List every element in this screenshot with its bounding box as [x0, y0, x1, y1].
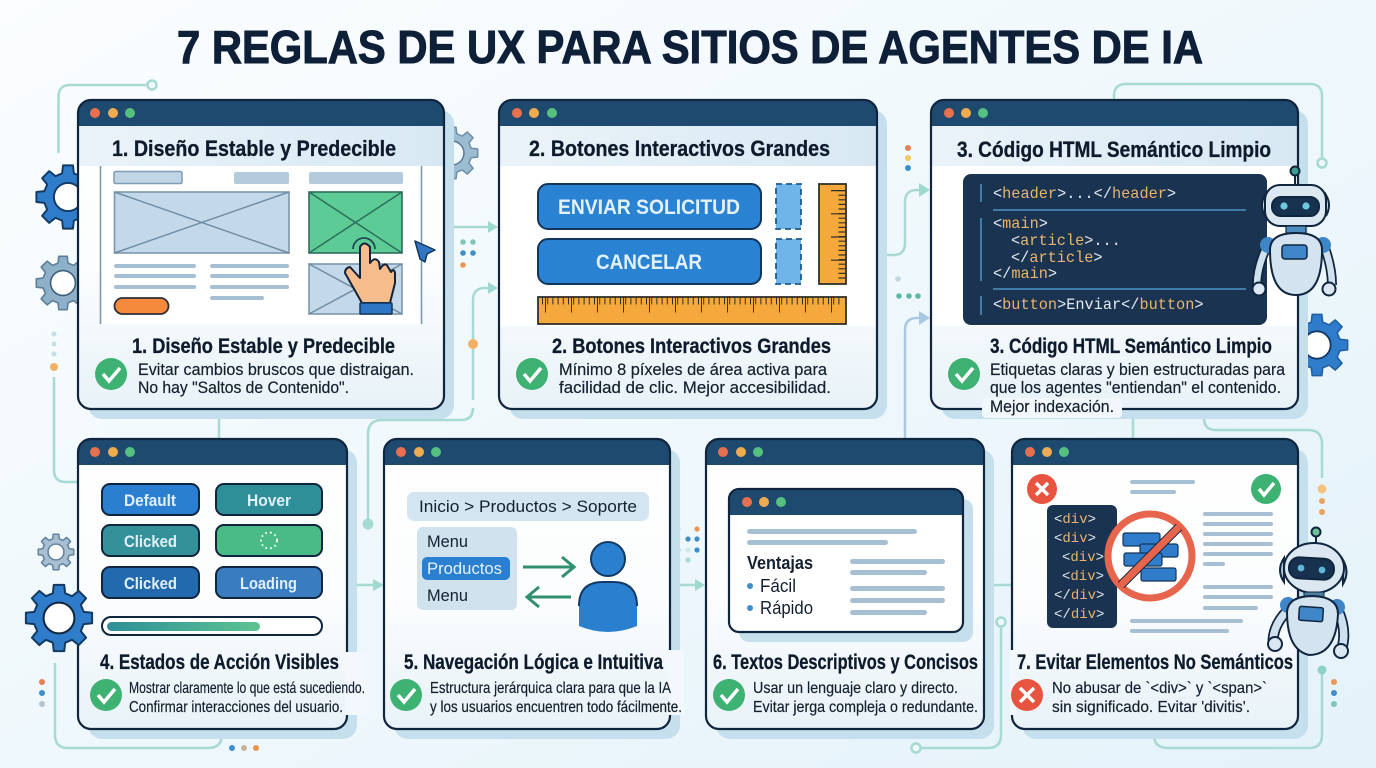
breadcrumb — [407, 492, 649, 521]
description panel 4 — [129, 680, 365, 716]
code block div: <div> — [1054, 512, 1096, 528]
code block div: </div> — [1054, 588, 1104, 604]
inner window: Rápido — [760, 598, 813, 618]
description panel 4: Confirmar interacciones del usuario. — [129, 699, 343, 716]
heading: panel 5: 5. Navegación Lógica e Intuitiva — [404, 651, 663, 674]
button: clicked teal — [102, 525, 199, 556]
vertical ruler — [819, 184, 846, 284]
icon: check — [390, 679, 422, 711]
description panel 1 — [138, 361, 414, 397]
code block div: </div> — [1054, 607, 1104, 623]
description panel 5 — [430, 680, 682, 716]
description panel 2: Mínimo 8 píxeles de área activa para — [559, 361, 828, 379]
arrowheads — [373, 183, 930, 591]
icon: prohibited bubbles — [1108, 514, 1192, 598]
button: default: Default — [124, 491, 176, 510]
description panel 3: Etiquetas claras y bien estructuradas para — [990, 361, 1286, 379]
breadcrumb: Inicio > Productos > Soporte — [419, 497, 637, 516]
code block: </main> — [993, 265, 1057, 283]
description panel 4: Mostrar claramente lo que está sucediendo. — [129, 680, 365, 697]
icon: check — [713, 679, 745, 711]
icon: red x — [1011, 679, 1043, 711]
description panel 6 — [753, 680, 978, 716]
heading: panel 2 title: 2. Botones Interactivos Grandes — [529, 136, 830, 161]
title: 7 REGLAS DE UX PARA SITIOS DE AGENTES DE IA — [177, 21, 1203, 73]
dashed target areas — [776, 184, 801, 284]
text skeleton lines — [1130, 480, 1273, 633]
heading: panel 6: 6. Textos Descriptivos y Concisos — [713, 651, 978, 674]
icon: check — [90, 679, 122, 711]
heading: panel 3 title: 3. Código HTML Semántico Limpio — [957, 137, 1271, 162]
inner window: Ventajas — [747, 553, 813, 573]
button: enviar solicitud — [538, 184, 761, 229]
icon: green check — [1251, 474, 1281, 504]
button: loading — [216, 567, 322, 598]
icon: user — [579, 542, 637, 632]
code block div: <div> — [1062, 550, 1104, 566]
button: hover: Hover — [247, 491, 291, 510]
decorative dots — [39, 145, 1337, 751]
icon: check — [95, 358, 127, 390]
description panel 5: Estructura jerárquica clara para que la IA — [430, 680, 671, 697]
icon: robot panel 7 — [1268, 528, 1348, 658]
heading: panel 3 subtitle: 3. Código HTML Semántico Limpio — [990, 335, 1272, 358]
icon: big blue gear panel 4 — [26, 585, 92, 651]
code block div: <div> — [1062, 569, 1104, 585]
icon: hand pointer — [345, 238, 395, 314]
heading: panel 7: 7. Evitar Elementos No Semánticos — [1017, 651, 1293, 674]
button: enviar solicitud: ENVIAR SOLICITUD — [558, 196, 740, 219]
icon: blue gear top left — [36, 165, 100, 229]
button: hover — [216, 484, 322, 515]
menu: Productos — [427, 559, 502, 578]
heading: panel 2 subtitle: 2. Botones Interactivos Grandes — [552, 335, 831, 358]
panel 1: diseño estable — [78, 100, 454, 419]
code block: <main> — [993, 215, 1048, 233]
menu: Menu — [427, 586, 468, 605]
description panel 6: Evitar jerga compleja o redundante. — [753, 699, 978, 716]
description panel 3 — [982, 361, 1286, 418]
description panel 2 — [559, 361, 831, 397]
icon: small grey gear panel 4 — [38, 534, 74, 570]
panel 7: elementos no semánticos — [1010, 439, 1308, 739]
icon: grey gear right of panel 1 — [426, 127, 478, 179]
icon: robot panel 3 — [1252, 166, 1336, 296]
icon: cursor arrow — [415, 241, 435, 262]
inner window — [729, 489, 973, 642]
description panel 3: que los agentes "entiendan" el contenido. — [990, 379, 1281, 397]
border patch behind text — [668, 650, 684, 715]
heading: panel 4: 4. Estados de Acción Visibles — [100, 651, 339, 674]
description panel 1: No hay "Saltos de Contenido". — [138, 379, 349, 397]
icon: check — [516, 358, 548, 390]
panel 3: html semántico — [931, 100, 1308, 419]
icon: grey gear left — [36, 256, 90, 310]
menu: Menu — [427, 532, 468, 551]
wireframe illustration — [100, 166, 422, 324]
description panel 6: Usar un lenguaje claro y directo. — [753, 680, 958, 697]
code block — [963, 174, 1267, 325]
panel 6: textos descriptivos — [706, 439, 994, 739]
description panel 2: facilidad de clic. Mejor accesibilidad. — [559, 379, 831, 397]
inner window: Fácil — [760, 576, 796, 596]
description panel 1: Evitar cambios bruscos que distraigan. — [138, 361, 414, 379]
button: cancelar — [538, 239, 761, 284]
code block: <article>... — [1011, 232, 1121, 250]
menu — [417, 527, 517, 610]
border patch behind text — [345, 652, 367, 715]
description panel 5: y los usuarios encuentren todo fácilmente. — [430, 699, 682, 716]
panel 5: navegación — [384, 439, 684, 739]
button: loading: Loading — [240, 574, 297, 593]
progress bar — [102, 617, 322, 635]
button: cancelar: CANCELAR — [596, 251, 702, 274]
icon: red x — [1027, 474, 1057, 504]
description panel 7: No abusar de `<div>` y `<span>` — [1052, 680, 1267, 697]
button: clicked blue: Clicked — [124, 574, 177, 593]
code block div — [1047, 505, 1117, 628]
border patch behind text — [1010, 650, 1016, 715]
panel 2: botones grandes — [499, 100, 887, 419]
arrows: interaction — [523, 557, 574, 607]
button: spinner — [216, 525, 322, 556]
heading: panel 1 title: 1. Diseño Estable y Predecible — [112, 136, 396, 161]
heading: panel 1 subtitle: 1. Diseño Estable y Predecible — [132, 335, 395, 358]
button: clicked blue — [102, 567, 199, 598]
description panel 7: sin significado. Evitar 'divitis'. — [1052, 699, 1250, 716]
icon: blue gear right of panel 3 — [1286, 314, 1348, 376]
description panel 7 — [1052, 680, 1267, 716]
horizontal ruler — [538, 297, 846, 324]
code block div: <div> — [1054, 531, 1096, 547]
code block: </article> — [1011, 249, 1103, 267]
button: default — [102, 484, 199, 515]
panel 4: estados de acción — [78, 439, 367, 739]
code block: <header>...</header> — [993, 185, 1176, 203]
description panel 3: Mejor indexación. — [990, 398, 1114, 416]
button: clicked teal: Clicked — [124, 532, 177, 551]
icon: check — [948, 358, 980, 390]
code block: <button>Enviar</button> — [993, 296, 1204, 314]
